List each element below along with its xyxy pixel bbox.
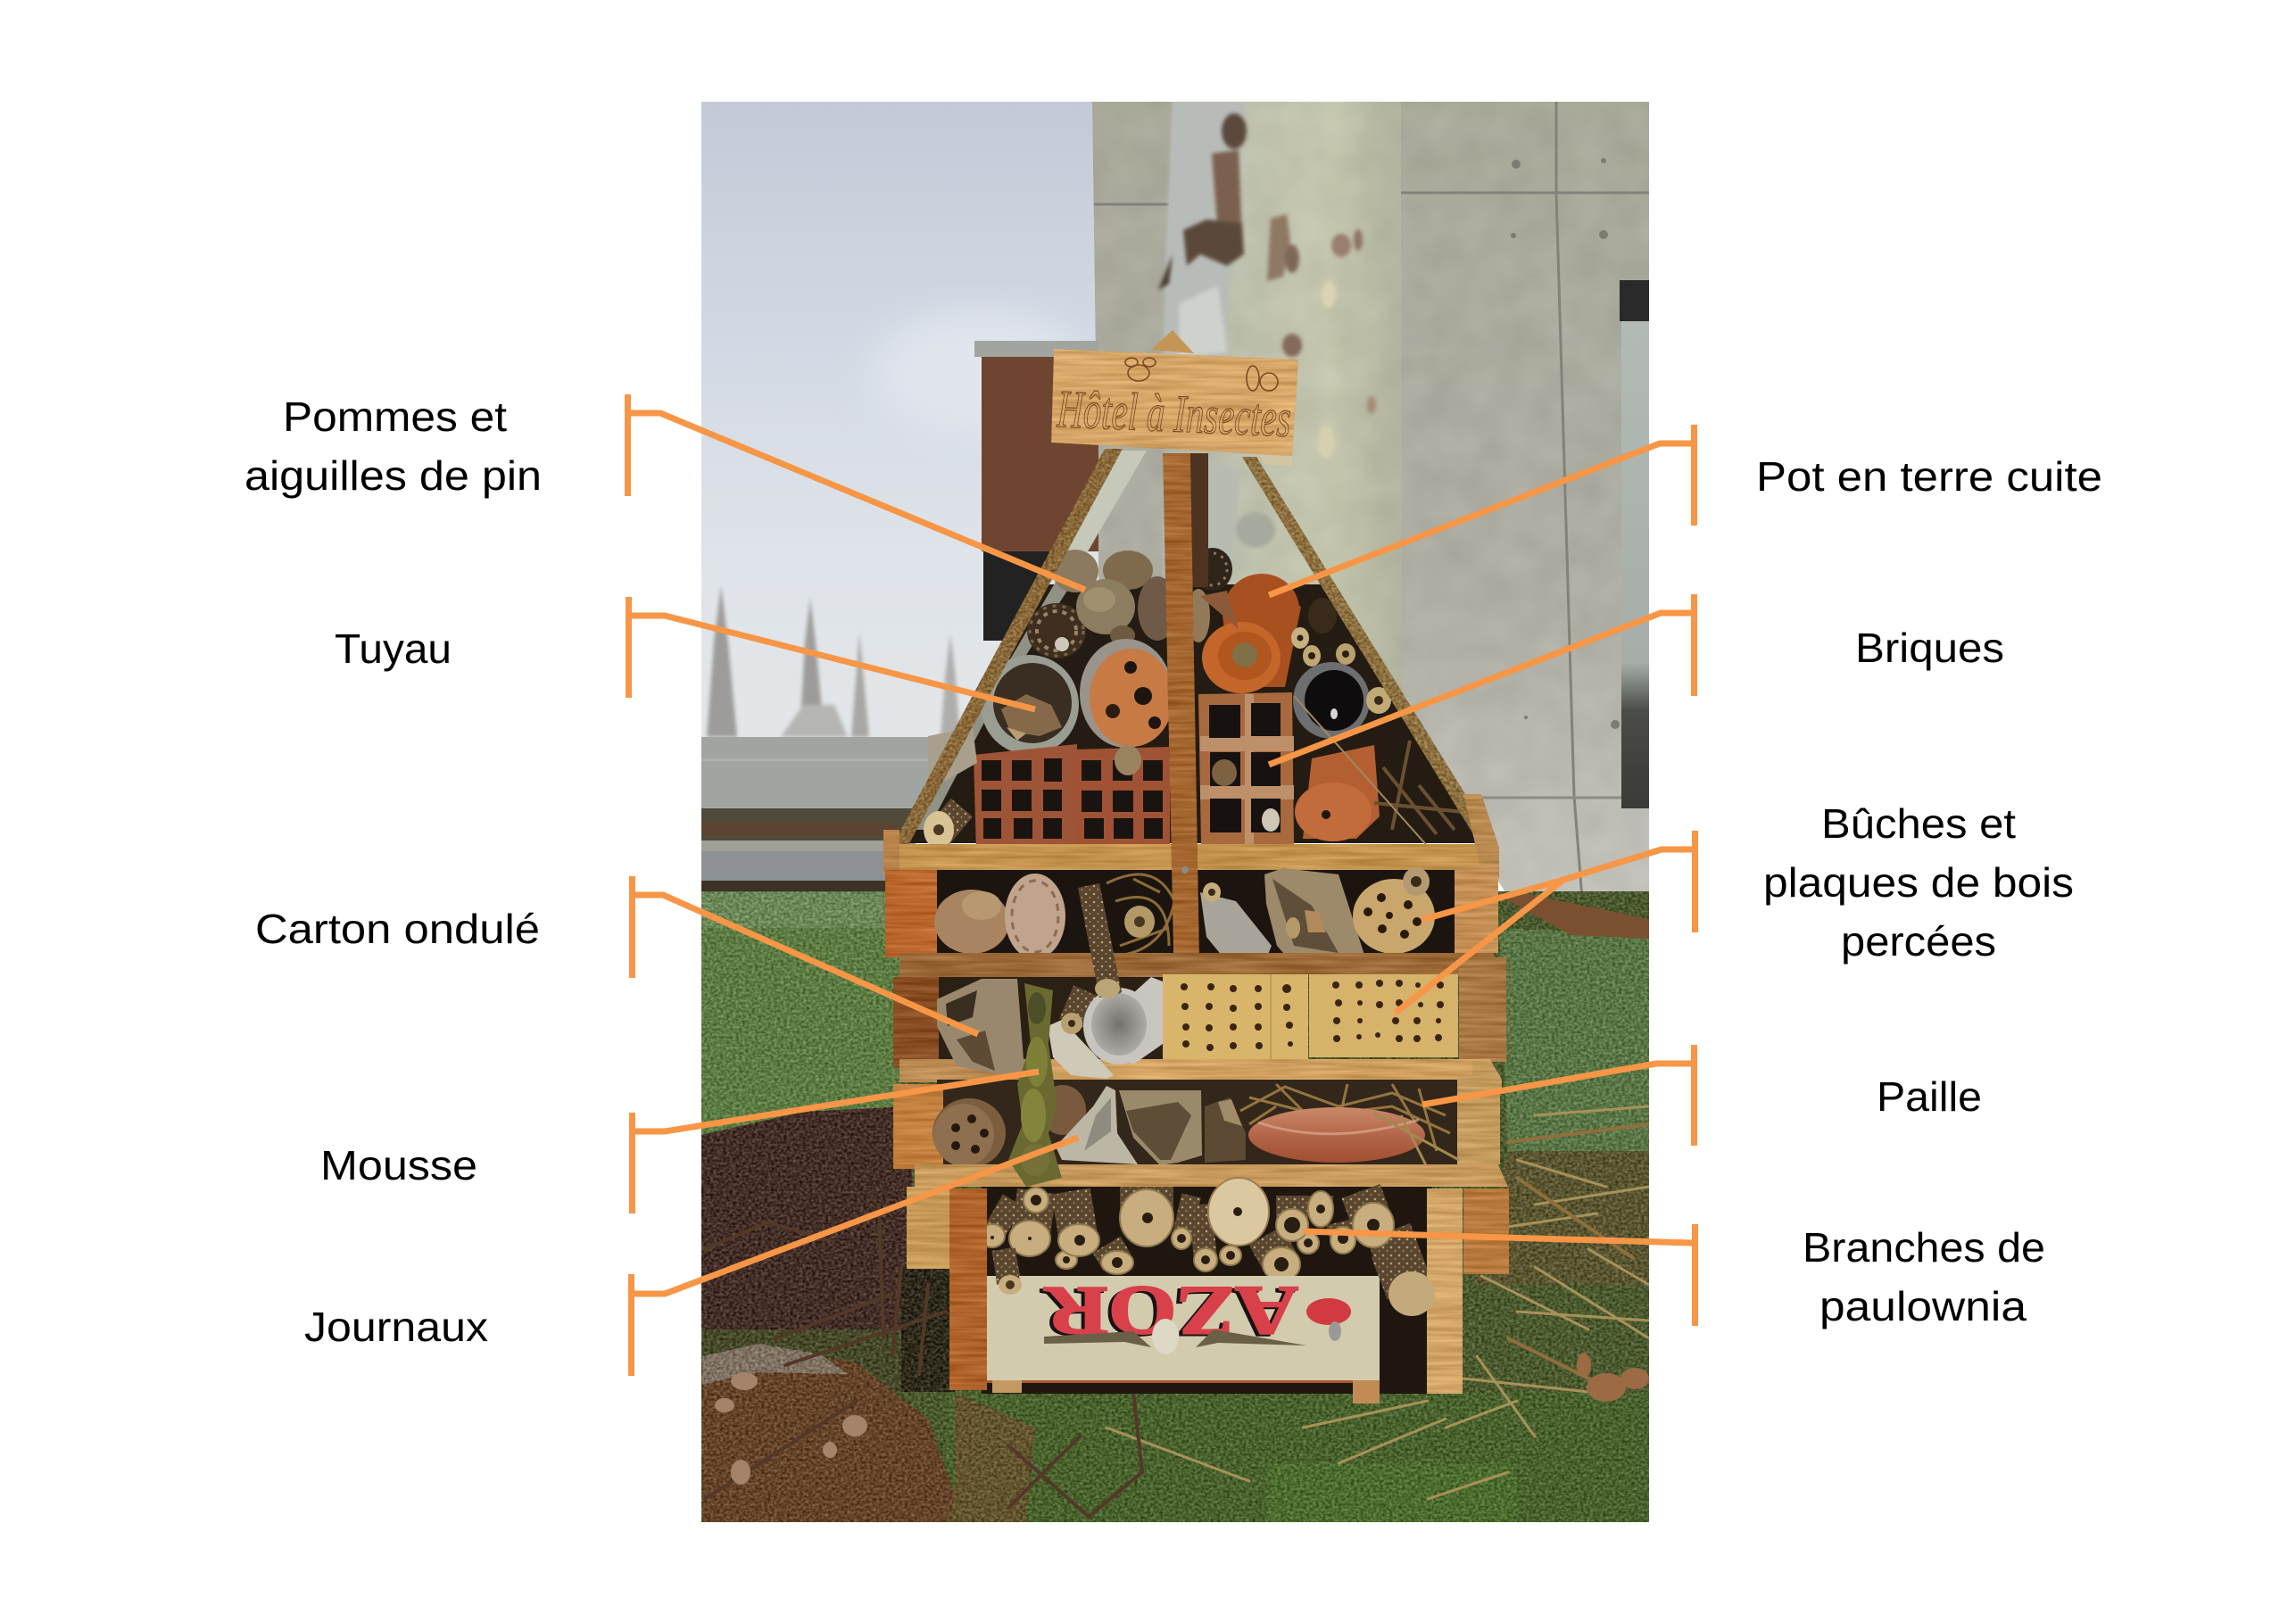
corrugated cardboard: [1119, 1090, 1202, 1165]
crate with upside-down AZOR lettering: AZOR: [1040, 1274, 1295, 1352]
concrete building: [1092, 102, 1649, 928]
roof interior: [893, 451, 1485, 843]
distant poplars: [707, 585, 960, 737]
tier 3 of the hotel: [893, 1075, 1500, 1178]
dark rear post: [1190, 453, 1208, 587]
small logs and cone, upper right: [1291, 598, 1355, 667]
insect hotel structure: [883, 330, 1509, 1404]
sky: [701, 102, 1112, 753]
label: Carton ondulé: Carton ondulé: [255, 906, 540, 952]
log on the right: [1501, 892, 1649, 939]
leader: Paille: [1422, 1045, 1697, 1146]
leader: Mousse: [629, 1072, 1039, 1213]
drilled log: [932, 1098, 1006, 1168]
leader: Bûches et plaques de bois percées: [1396, 831, 1698, 1013]
distant wall, hedge and road: [701, 737, 951, 892]
bricks: [974, 692, 1294, 852]
terracotta bowl: [1248, 1107, 1425, 1163]
wooden sign: Hôtel à Insectes: [1051, 330, 1298, 466]
newspaper: [1200, 892, 1272, 956]
label: Briques: Briques: [1855, 625, 2004, 671]
label: Bûches et plaques de bois percées: [1763, 800, 2074, 965]
leader: Briques: [1269, 594, 1697, 765]
label: Bûches et plaques de bois percées: plaques de bois: [1763, 859, 2074, 906]
moss: [1008, 983, 1062, 1187]
grey pot: [1293, 662, 1391, 739]
ground: grass, dirt and straw: [701, 891, 1649, 1522]
second terracotta pot and twigs: [1294, 696, 1463, 857]
small log and cardboard scrap, lower left of roof: [924, 727, 977, 849]
label: Bûches et plaques de bois percées: percées: [1841, 918, 1996, 965]
centre post: [1163, 453, 1199, 953]
tier 1 of the hotel: [885, 865, 1498, 964]
dead leaves: [1577, 1353, 1649, 1402]
leader: Tuyau: [626, 597, 1035, 709]
straw nest: [1107, 874, 1178, 955]
posts: [949, 1188, 987, 1390]
front bark log on the right: [1392, 1249, 1408, 1291]
panel: photograph of the insect hotel: [701, 102, 1649, 1522]
tier 2 of the hotel: [893, 957, 1506, 1068]
wooden sign: Hôtel à Insectes: Hôtel à Insectes: [1056, 379, 1292, 448]
plank 2: [899, 953, 1494, 977]
top shelf: [883, 794, 1499, 879]
label: Pommes et aiguilles de pin: aiguilles de pin: [245, 452, 542, 499]
pebbles on the mound: [715, 1372, 867, 1485]
pine cones: [934, 874, 1065, 959]
newspaper: [1056, 1086, 1138, 1164]
rolled cardboard: [1205, 1097, 1246, 1163]
label: Pot en terre cuite: Pot en terre cuite: [1756, 453, 2102, 500]
label: Branches de paulownia: Branches de: [1803, 1224, 2045, 1271]
label: Pommes et aiguilles de pin: [245, 393, 542, 499]
label: Paille: Paille: [1877, 1073, 1982, 1120]
leader: Pot en terre cuite: [1269, 425, 1697, 595]
label: Pommes et aiguilles de pin: Pommes et: [283, 393, 507, 440]
tier 2 front contents: cardboard, log, newspaper and white tube: [937, 883, 1163, 1079]
icon: butterfly: [1247, 366, 1278, 391]
label: Branches de paulownia: [1803, 1224, 2045, 1329]
brown building: [974, 341, 1098, 641]
leader: Carton ondulé: [629, 876, 978, 1034]
leader: Journaux: [628, 1138, 1078, 1376]
brown cone behind: [1040, 1085, 1086, 1135]
label: Branches de paulownia: paulownia: [1819, 1283, 2027, 1329]
small log over the crate: [1004, 1249, 1008, 1283]
corrugated cardboard: [1264, 868, 1364, 964]
label: Tuyau: Tuyau: [335, 625, 452, 672]
plane tree trunk: [1156, 102, 1403, 692]
top contents: pine apples and cones: [1027, 548, 1232, 658]
straw: [1240, 1084, 1450, 1151]
drilled terracotta cylinder: [1080, 639, 1173, 748]
label: Bûches et plaques de bois percées: Bûches et: [1821, 800, 2016, 847]
pipe: grey tube with crumpled filling: [981, 655, 1079, 755]
terracotta pot: [1200, 574, 1301, 693]
leader: Pommes et aiguilles de pin: [625, 394, 1085, 590]
straw and twigs: [1107, 1106, 1649, 1499]
label: Journaux: Journaux: [304, 1304, 488, 1350]
crate with upside-down AZOR lettering: [987, 1272, 1380, 1404]
label: Mousse: Mousse: [320, 1142, 477, 1188]
window: [1620, 280, 1649, 808]
icon: bee: [1125, 358, 1156, 381]
plank 3: [899, 1059, 1502, 1093]
roof boards: [889, 449, 1496, 852]
drilled wooden plaques: [1163, 974, 1458, 1059]
drilled log: [1353, 867, 1435, 954]
leader: Branches de paulownia: [1304, 1224, 1698, 1326]
crate with upside-down AZOR lettering: AZOR: [1043, 1272, 1298, 1350]
plank 4: [915, 1164, 1508, 1187]
base tier: paulownia branches: [907, 1178, 1509, 1404]
